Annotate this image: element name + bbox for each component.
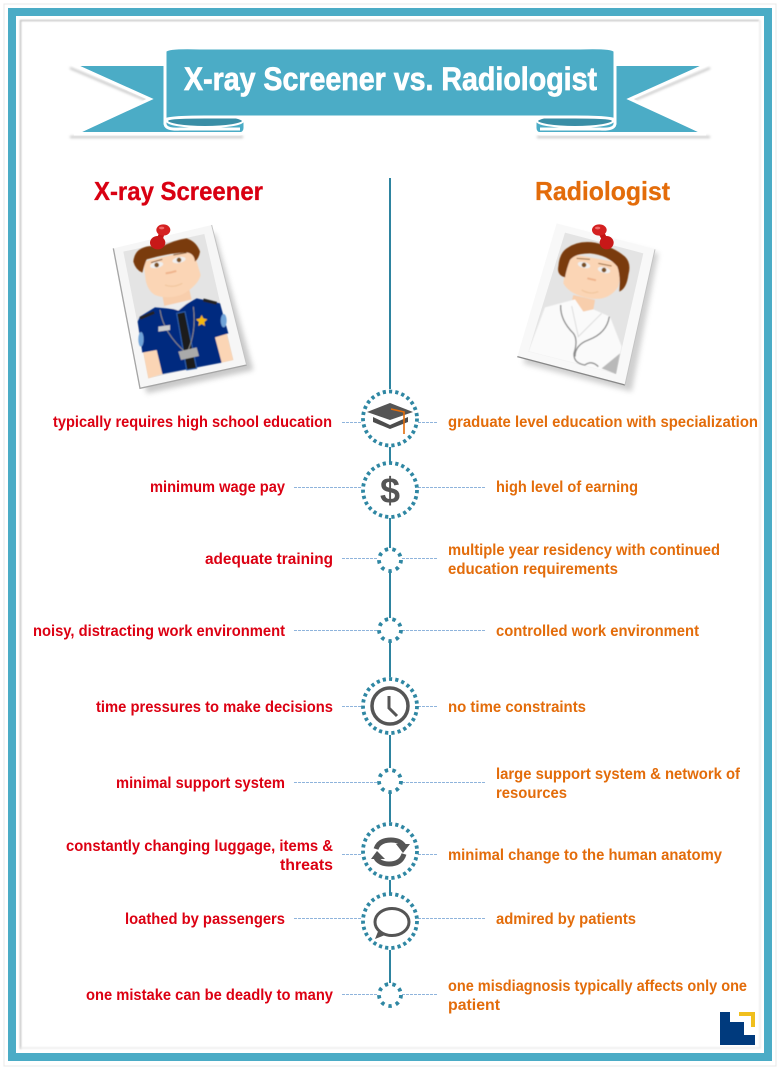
radiologist text column: multiple year residency with continued — [448, 542, 720, 559]
icon: speech bubble — [363, 894, 417, 948]
connector lines — [294, 422, 486, 994]
radiologist text column: graduate level education with specialization — [448, 414, 758, 431]
radiologist text column — [448, 414, 758, 1014]
main ribbon — [165, 48, 615, 120]
left ribbon outline — [72, 64, 245, 134]
officer figure — [133, 238, 233, 378]
radiologist text column: large support system & network of — [496, 766, 741, 783]
central timeline — [389, 178, 391, 983]
screener text column: minimum wage pay — [150, 479, 285, 496]
right ribbon outline — [535, 64, 708, 134]
heading: Radiologist: Radiologist — [535, 176, 670, 206]
radiologist text column: minimal change to the human anatomy — [448, 847, 722, 864]
push pin — [592, 224, 614, 249]
screener text column: minimal support system — [116, 775, 285, 792]
screener text column — [33, 414, 333, 1004]
icon: small dotted circle, environment — [379, 619, 401, 641]
screener text column: typically requires high school education — [53, 414, 332, 431]
heading: X-ray Screener: X-ray Screener — [94, 176, 263, 206]
title banner — [70, 48, 710, 137]
screener text column: constantly changing luggage, items & — [66, 838, 333, 855]
icon: small dotted circle, training — [379, 549, 401, 571]
screener text column: time pressures to make decisions — [96, 699, 333, 716]
right ribbon tail — [536, 66, 700, 132]
radiologist text column: controlled work environment — [496, 623, 700, 640]
screener text column: noisy, distracting work environment — [33, 623, 286, 640]
icon: dollar sign: $ — [380, 470, 400, 511]
icon: small dotted circle, mistakes — [379, 984, 401, 1006]
screener text column: adequate training — [205, 551, 333, 568]
left ribbon fold — [165, 112, 243, 129]
radiologist text column: resources — [496, 785, 567, 802]
logo — [720, 1012, 755, 1045]
radiologist text column: education requirements — [448, 561, 618, 578]
screener text column: loathed by passengers — [125, 911, 285, 928]
icon: refresh arrows — [363, 824, 417, 878]
radiologist text column: admired by patients — [496, 911, 636, 928]
radiologist text column: one misdiagnosis typically affects only one — [448, 978, 747, 995]
push pin — [150, 224, 170, 249]
radiologist text column: high level of earning — [496, 479, 638, 496]
icon: clock — [363, 679, 417, 733]
doctor figure — [528, 242, 629, 374]
right ribbon fold — [537, 112, 615, 129]
screener text column: one mistake can be deadly to many — [86, 987, 333, 1004]
photo: X-ray screener — [113, 224, 253, 393]
icon: dollar sign — [363, 463, 417, 517]
radiologist text column: no time constraints — [448, 699, 586, 716]
screener text column: threats — [280, 857, 333, 874]
radiologist text column: patient — [448, 997, 501, 1014]
title text: X-ray Screener vs. Radiologist — [184, 61, 597, 97]
icon: small dotted circle, support — [379, 770, 401, 792]
left ribbon tail — [80, 66, 244, 132]
banner shadows — [70, 68, 710, 137]
photo: radiologist — [517, 223, 658, 392]
icon: graduation cap — [363, 392, 417, 446]
